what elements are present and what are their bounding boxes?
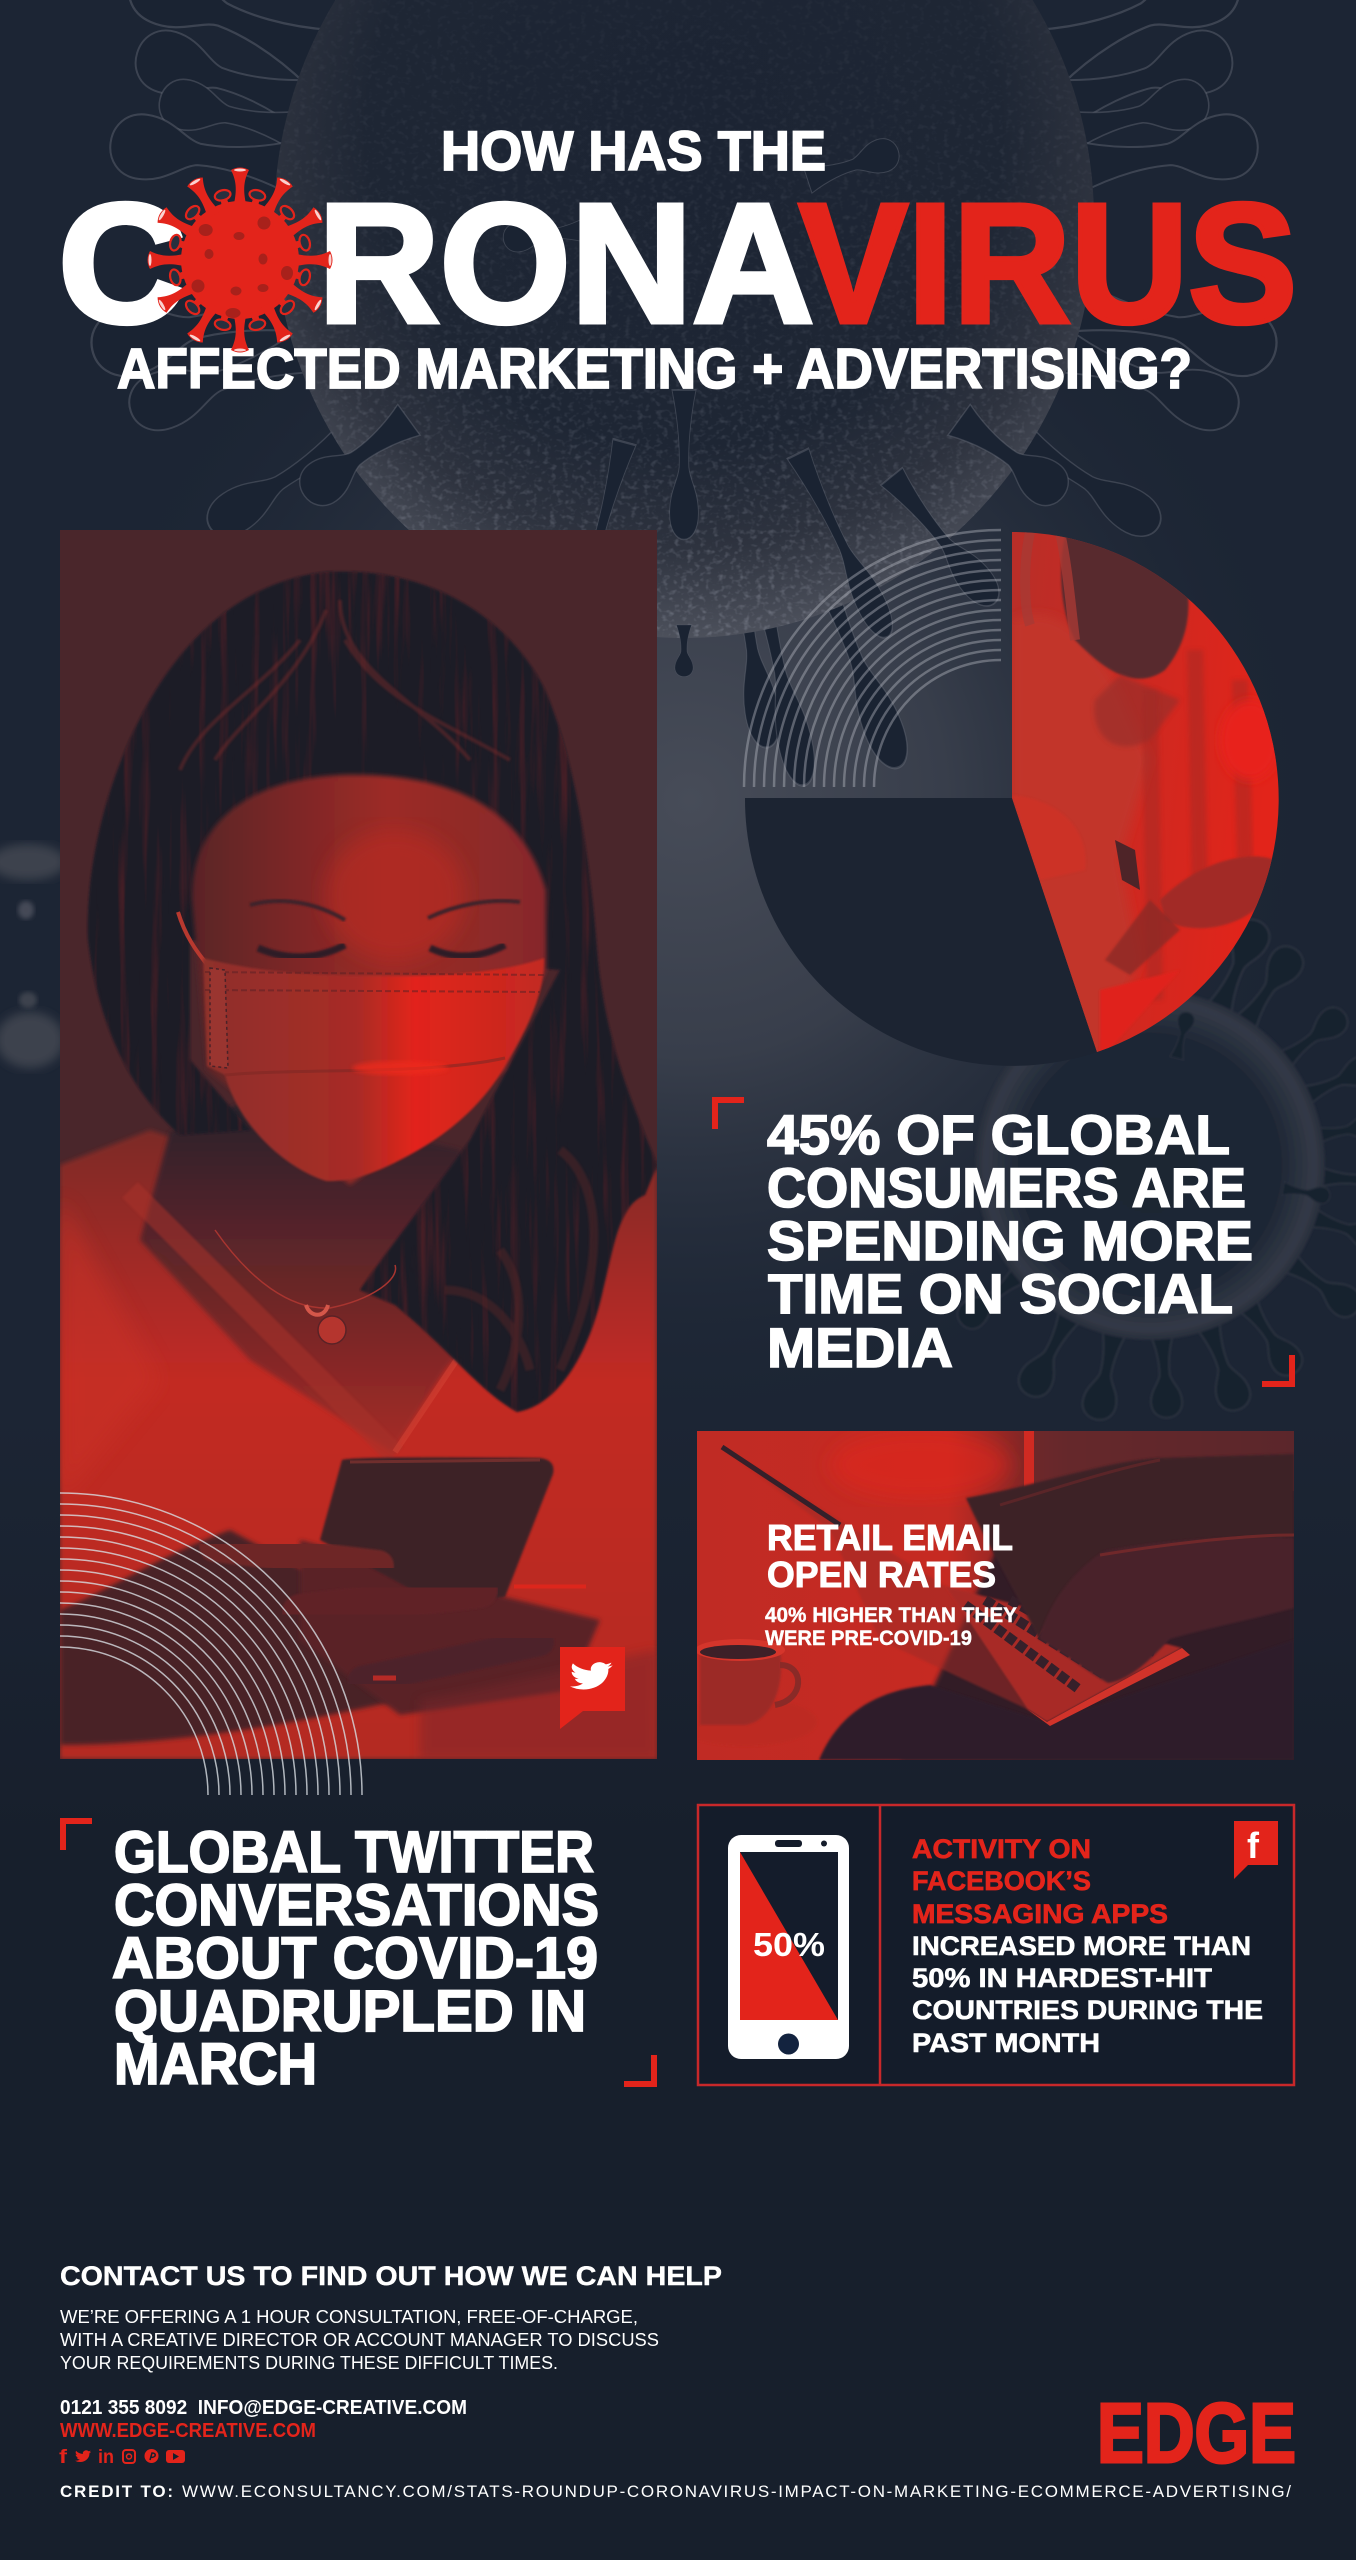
- icon: facebook speech tag: f: [1247, 1825, 1260, 1866]
- body: consultation offer: WE’RE OFFERING A 1 HOUR CONSULTATION, FREE-OF-CHARGE,: [60, 2307, 638, 2327]
- dark right side: [899, 1552, 1248, 1760]
- icon: phone showing 50%: [728, 1835, 849, 2059]
- text block: global twitter conversations: [60, 1818, 657, 2097]
- face: [192, 775, 546, 1185]
- text: retail email open rates: WERE PRE-COVID-19: [765, 1627, 972, 1650]
- icon: facebook speech tag: [1234, 1821, 1278, 1879]
- text block: global twitter conversations: CONVERSATIONS: [114, 1873, 599, 1938]
- text: increased more than 50%: INCREASED MORE THAN: [912, 1931, 1251, 1961]
- background: large coronavirus illustration: [85, 0, 1283, 789]
- bracket top-left: [60, 1818, 92, 1850]
- text: increased more than 50%: COUNTRIES DURING THE: [912, 1995, 1263, 2025]
- photo panel: woman in mask looking at phone: [60, 530, 660, 1759]
- title word: corona: C: [58, 169, 186, 359]
- title word: virus: VIRUS: [799, 169, 1297, 359]
- credit line: WWW.ECONSULTANCY.COM/STATS-ROUNDUP-CORONAVIRUS-IMPACT-ON-MARKETING-ECOMMERCE-ADVERTISING/: [182, 2482, 1291, 2501]
- title: [58, 119, 1297, 401]
- text block: 45% of global consumers: MEDIA: [767, 1316, 953, 1379]
- lower-left forearm shadow: [60, 1530, 400, 1745]
- hands: [966, 1454, 1294, 1639]
- title word: corona: RONA: [318, 169, 814, 359]
- social icons: [59, 2447, 185, 2468]
- laptop body: [945, 1586, 1182, 1722]
- text: retail email open rates: 40% HIGHER THAN THEY: [765, 1604, 1017, 1627]
- bracket top-left: [712, 1097, 744, 1129]
- necklace: [215, 1230, 396, 1308]
- logo: EDGE: EDGE: [1097, 2386, 1296, 2480]
- text: activity on facebook's messaging apps: FACEBOOK’S: [912, 1866, 1091, 1896]
- text: activity on facebook's messaging apps: MESSAGING APPS: [912, 1899, 1168, 1929]
- pie: red photo slice: [1012, 530, 1282, 1070]
- fingers: [215, 1546, 378, 1566]
- phone: [320, 1457, 553, 1605]
- laptop screen wedge: [722, 1447, 1027, 1709]
- icon: phone showing 50%: 50%: [753, 1926, 825, 1963]
- bracket bottom-right: [624, 2055, 657, 2087]
- text block: global twitter conversations: ABOUT COVID-19: [112, 1926, 598, 1991]
- text block: global twitter conversations: QUADRUPLED IN: [114, 1979, 586, 2044]
- text block: 45% of global consumers: [712, 1097, 1295, 1387]
- heading: contact us: CONTACT US TO FIND OUT HOW WE CAN HELP: [60, 2261, 722, 2291]
- text: retail email open rates: [765, 1517, 1017, 1650]
- text: activity on facebook's messaging apps: ACTIVITY ON: [912, 1834, 1091, 1864]
- text block: global twitter conversations: MARCH: [114, 2032, 317, 2097]
- coffee cup: [673, 1698, 817, 1746]
- hair: [88, 571, 657, 1412]
- icon: red coronavirus replacing the O: [148, 168, 332, 352]
- social icons: in: [98, 2447, 114, 2468]
- icon: twitter speech tag: [560, 1647, 625, 1729]
- body: consultation offer: WITH A CREATIVE DIRECTOR OR ACCOUNT MANAGER TO DISCUSS: [60, 2330, 659, 2350]
- text block: 45% of global consumers: SPENDING MORE: [767, 1209, 1253, 1272]
- text block: 45% of global consumers: CONSUMERS ARE: [767, 1156, 1246, 1219]
- decorative line arcs on photo: [60, 1493, 362, 1795]
- pie: navy slice: [745, 798, 1097, 1066]
- panel: retail email open rates photo: [673, 1430, 1294, 1760]
- chart: pie with photo slice: [744, 530, 1282, 1070]
- title word: corona: [58, 169, 814, 359]
- text: activity on facebook's messaging apps: [912, 1834, 1168, 1929]
- social icons: f: [59, 2447, 68, 2468]
- credit line: CREDIT TO:: [60, 2482, 173, 2501]
- neck and chest: [138, 1104, 460, 1449]
- face mask: [203, 958, 544, 1181]
- title line: affected marketing + advertising?: AFFECTED MARKETING + ADVERTISING?: [117, 337, 1192, 401]
- lap: [819, 1640, 1294, 1760]
- pie: line arcs quadrant: [744, 530, 1001, 787]
- text: increased more than 50%: PAST MONTH: [912, 2028, 1100, 2058]
- body: consultation offer: [60, 2307, 659, 2373]
- ear strap: [176, 911, 206, 964]
- shirt: [60, 1130, 657, 1759]
- bracket bottom-right: [1262, 1355, 1295, 1387]
- hand mass behind fingers: [300, 1540, 600, 1715]
- contact details: 0121 355 8092 INFO@EDGE-CREATIVE.COM: [60, 2397, 467, 2419]
- panel: facebook messaging stat: [698, 1805, 1294, 2085]
- website link: WWW.EDGE-CREATIVE.COM: [60, 2420, 316, 2442]
- text: increased more than 50%: 50% IN HARDEST-HIT: [912, 1963, 1213, 1993]
- text block: global twitter conversations: GLOBAL TWITTER: [114, 1820, 594, 1885]
- background: small virus, right: [952, 912, 1356, 1423]
- footer: contact text: [59, 2261, 1291, 2501]
- title line: how has the: HOW HAS THE: [441, 119, 826, 182]
- background: small virus, left edge: [0, 844, 66, 1068]
- text block: 45% of global consumers: TIME ON SOCIAL: [768, 1262, 1233, 1325]
- text: retail email open rates: RETAIL EMAIL: [767, 1517, 1013, 1558]
- text: retail email open rates: OPEN RATES: [767, 1554, 996, 1595]
- keyboard keys: [965, 1600, 1155, 1690]
- body: consultation offer: YOUR REQUIREMENTS DURING THESE DIFFICULT TIMES.: [60, 2353, 558, 2373]
- text: increased more than 50%: [912, 1931, 1263, 2058]
- text block: 45% of global consumers: 45% OF GLOBAL: [767, 1103, 1230, 1166]
